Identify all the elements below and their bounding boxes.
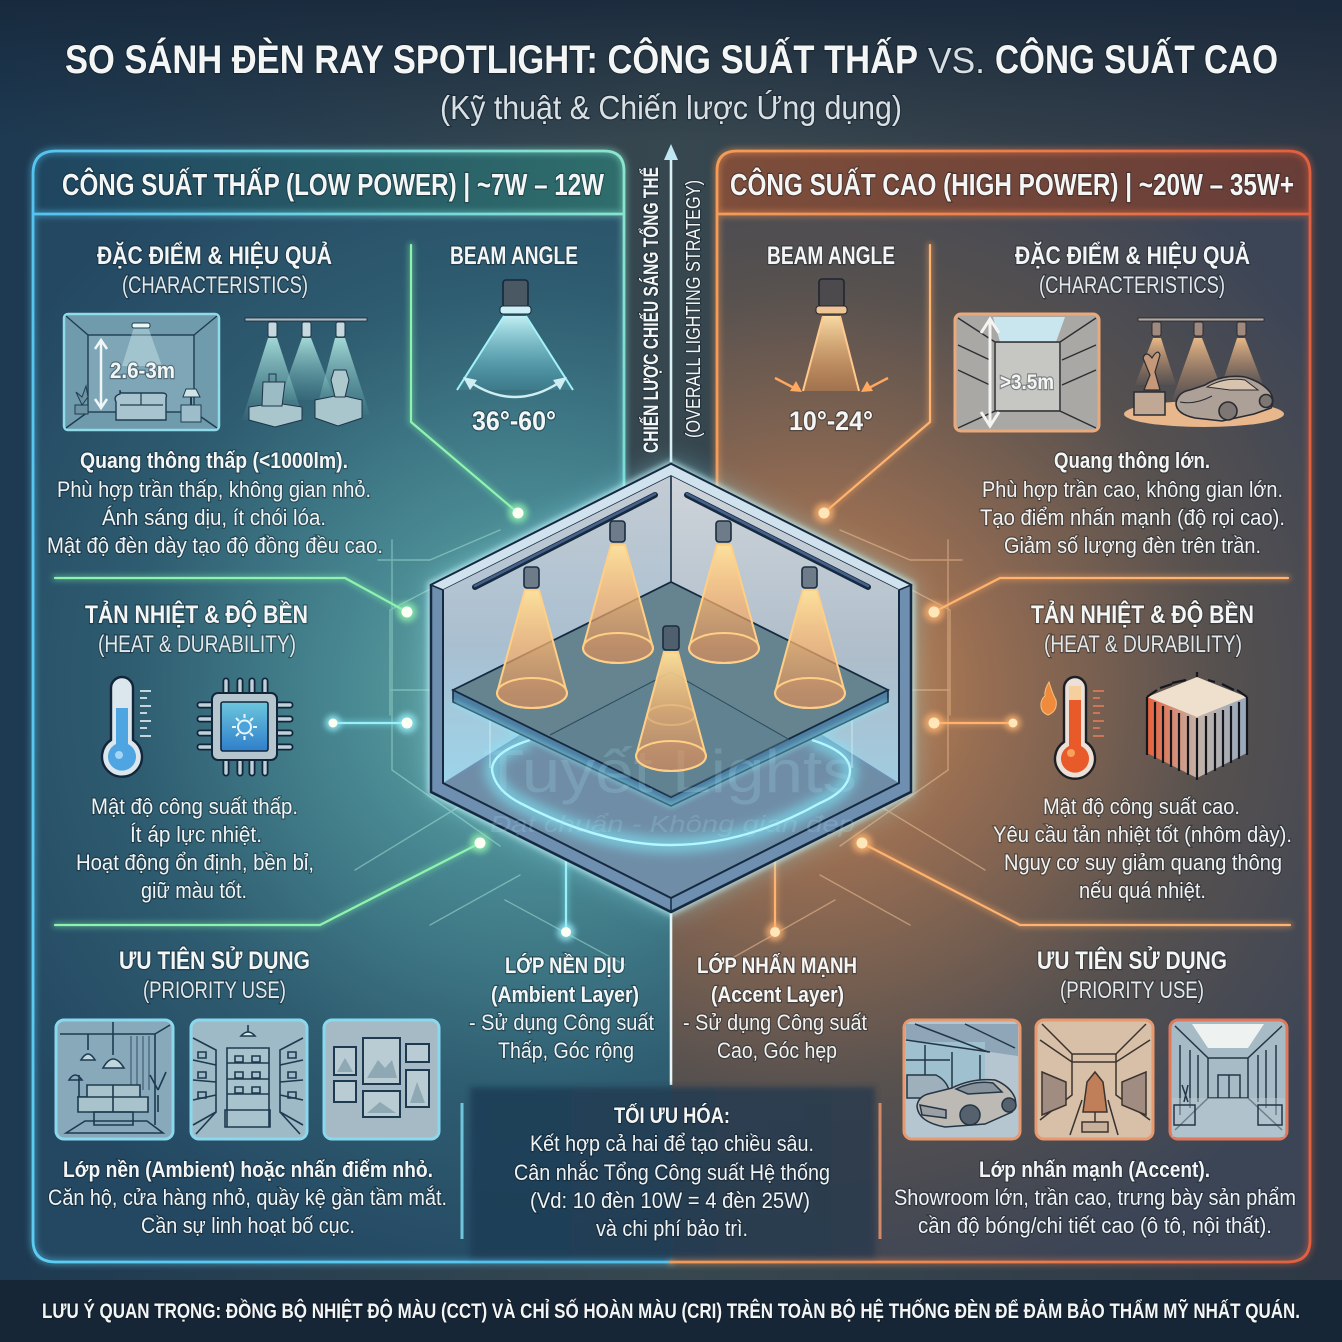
optimisation callout: TỐI ƯU HÓA: — [614, 1102, 730, 1128]
picture: luxury lobby — [1170, 1020, 1287, 1139]
characteristics right text: Giảm số lượng đèn trên trần. — [1004, 533, 1261, 558]
picture: living room — [56, 1020, 173, 1139]
subtitle: (Kỹ thuật & Chiến lược Ứng dụng) — [440, 89, 902, 126]
ambient layer label: - Sử dụng Công suất — [469, 1010, 654, 1035]
accent layer label: LỚP NHẤN MẠNH — [697, 953, 857, 978]
connector lines — [55, 245, 1290, 930]
vertical strategy arrow: CHIẾN LƯỢC CHIẾU SÁNG TỔNG THỂ — [639, 167, 663, 453]
heat left heading — [85, 599, 308, 658]
heat right text — [993, 794, 1292, 903]
icon: high ceiling hall: >3.5m — [1000, 371, 1054, 394]
right wall — [671, 476, 899, 783]
heat right heading: TẢN NHIỆT & ĐỘ BỀN — [1031, 599, 1254, 629]
characteristics right text — [980, 448, 1285, 558]
beam angle low power — [450, 242, 578, 436]
priority left text: Cần sự linh hoạt bố cục. — [141, 1213, 355, 1238]
optimisation callout: Kết hợp cả hai để tạo chiều sâu. — [530, 1131, 814, 1156]
heat left heading: TẢN NHIỆT & ĐỘ BỀN — [85, 599, 308, 629]
priority right text: Showroom lớn, trần cao, trưng bày sản phẩm — [894, 1185, 1296, 1210]
characteristics right heading: ĐẶC ĐIỂM & HIỆU QUẢ — [1015, 240, 1250, 270]
title: CÔNG SUẤT CAO — [995, 36, 1278, 82]
beam angle low power: BEAM ANGLE — [450, 242, 578, 270]
characteristics left text: Ánh sáng dịu, ít chói lóa. — [102, 505, 326, 530]
glass slab — [453, 690, 888, 806]
optimisation callout: (Vd: 10 đèn 10W = 4 đèn 25W) — [530, 1188, 810, 1213]
heat left text: giữ màu tốt. — [141, 878, 247, 903]
priority left heading — [119, 945, 310, 1004]
left wall — [443, 476, 671, 783]
beam angle high power: BEAM ANGLE — [767, 242, 895, 270]
priority right text — [894, 1157, 1296, 1238]
watermark — [482, 738, 857, 837]
heat right text: Yêu cầu tản nhiệt tốt (nhôm dày). — [993, 822, 1292, 847]
priority left text — [48, 1157, 447, 1238]
picture: shop shelves — [191, 1020, 307, 1139]
central seam line — [670, 912, 672, 1085]
ambient layer label: LỚP NỀN DỊU — [505, 953, 625, 978]
heat right heading — [1031, 599, 1254, 658]
characteristics left heading: (CHARACTERISTICS) — [122, 272, 308, 299]
priority right heading — [1037, 945, 1227, 1004]
icon: heat sink — [1147, 672, 1247, 780]
picture: fashion boutique — [1036, 1020, 1153, 1139]
characteristics left text: Mật độ đèn dày tạo độ đồng đều cao. — [47, 533, 383, 558]
priority right text: cần độ bóng/chi tiết cao (ô tô, nội thất). — [918, 1213, 1272, 1238]
bottom note bar — [0, 1280, 1342, 1342]
node dots — [325, 503, 1021, 941]
picture: gallery wall — [324, 1020, 439, 1139]
characteristics right text: Phù hợp trần cao, không gian lớn. — [982, 477, 1283, 502]
panel: high power frame — [671, 151, 1310, 1262]
icon: track lights over display — [242, 318, 370, 427]
picture: car showroom — [904, 1020, 1020, 1139]
icon: hot thermometer with flame — [1041, 677, 1104, 779]
characteristics right heading: (CHARACTERISTICS) — [1039, 272, 1225, 299]
ambient layer label: Thấp, Góc rộng — [498, 1038, 634, 1063]
title: SO SÁNH ĐÈN RAY SPOTLIGHT: CÔNG SUẤT THẤP — [65, 36, 918, 82]
heat left text: Hoạt động ổn định, bền bỉ, — [76, 850, 314, 875]
characteristics left text: Quang thông thấp (<1000lm). — [80, 448, 348, 473]
heat right heading: (HEAT & DURABILITY) — [1044, 631, 1242, 658]
vertical strategy arrow: (OVERALL LIGHTING STRATEGY) — [683, 180, 705, 438]
title: VS. — [928, 40, 985, 81]
decorative circuit lines — [355, 440, 985, 965]
heat left heading: (HEAT & DURABILITY) — [98, 631, 296, 658]
low power heading: CÔNG SUẤT THẤP (LOW POWER) | ~7W – 12W — [62, 166, 605, 202]
lower floor — [443, 670, 899, 898]
ambient layer label — [469, 953, 654, 1063]
icon: cool thermometer — [102, 677, 151, 777]
optimisation callout: và chi phí bảo trì. — [596, 1216, 748, 1241]
accent layer label: - Sử dụng Công suất — [683, 1010, 867, 1035]
track rails — [475, 494, 868, 587]
priority left text: Lớp nền (Ambient) hoặc nhấn điểm nhỏ. — [63, 1157, 433, 1182]
heat left text — [76, 794, 314, 903]
watermark: Tuyết Lights — [482, 738, 857, 805]
panel: low power frame — [33, 151, 671, 1262]
icon: low ceiling room: 2.6-3m — [110, 358, 175, 383]
beam angle high power — [767, 242, 895, 436]
watermark: Đạt chuẩn - Không gian đẹp — [490, 811, 855, 837]
room outer shell — [431, 464, 911, 912]
top rim — [431, 464, 911, 590]
vertical strategy arrow — [639, 144, 705, 462]
optimisation callout — [462, 1087, 880, 1257]
priority left heading: ƯU TIÊN SỬ DỤNG — [119, 945, 310, 975]
beam angle low power: 36°-60° — [472, 406, 556, 436]
icon: track lights with car — [1124, 318, 1284, 427]
heat left text: Ít áp lực nhiệt. — [130, 822, 262, 847]
characteristics left text: Phù hợp trần thấp, không gian nhỏ. — [57, 477, 371, 502]
characteristics left text — [47, 448, 383, 558]
central isometric room — [431, 464, 911, 912]
accent layer label: Cao, Góc hẹp — [717, 1038, 837, 1063]
heat right text: nếu quá nhiệt. — [1079, 878, 1206, 903]
characteristics right text: Tạo điểm nhấn mạnh (độ rọi cao). — [980, 505, 1285, 530]
heat right text: Nguy cơ suy giảm quang thông — [1004, 850, 1282, 875]
priority left text: Căn hộ, cửa hàng nhỏ, quầy kệ gần tầm mắt. — [48, 1185, 447, 1210]
priority left heading: (PRIORITY USE) — [143, 977, 286, 1004]
ambient glow ring — [490, 720, 852, 845]
priority right text: Lớp nhấn mạnh (Accent). — [979, 1157, 1210, 1182]
icon: chip with sun — [200, 681, 290, 773]
icon: high ceiling hall — [955, 314, 1099, 431]
priority right heading: ƯU TIÊN SỬ DỤNG — [1037, 945, 1227, 975]
spotlight fixtures — [524, 521, 817, 650]
characteristics right heading — [1015, 240, 1250, 299]
accent layer label — [683, 953, 867, 1063]
optimisation callout: Cân nhắc Tổng Công suất Hệ thống — [514, 1160, 830, 1185]
heat right text: Mật độ công suất cao. — [1043, 794, 1240, 819]
characteristics left heading: ĐẶC ĐIỂM & HIỆU QUẢ — [97, 240, 332, 270]
characteristics right text: Quang thông lớn. — [1054, 448, 1210, 473]
beam angle high power: 10°-24° — [789, 406, 873, 436]
spotlight cones — [497, 545, 845, 771]
priority right heading: (PRIORITY USE) — [1060, 977, 1204, 1004]
icon: low ceiling room — [64, 314, 219, 430]
accent layer label: (Accent Layer) — [711, 982, 844, 1007]
heat left text: Mật độ công suất thấp. — [91, 794, 298, 819]
ambient layer label: (Ambient Layer) — [491, 982, 639, 1007]
characteristics left heading — [97, 240, 332, 299]
